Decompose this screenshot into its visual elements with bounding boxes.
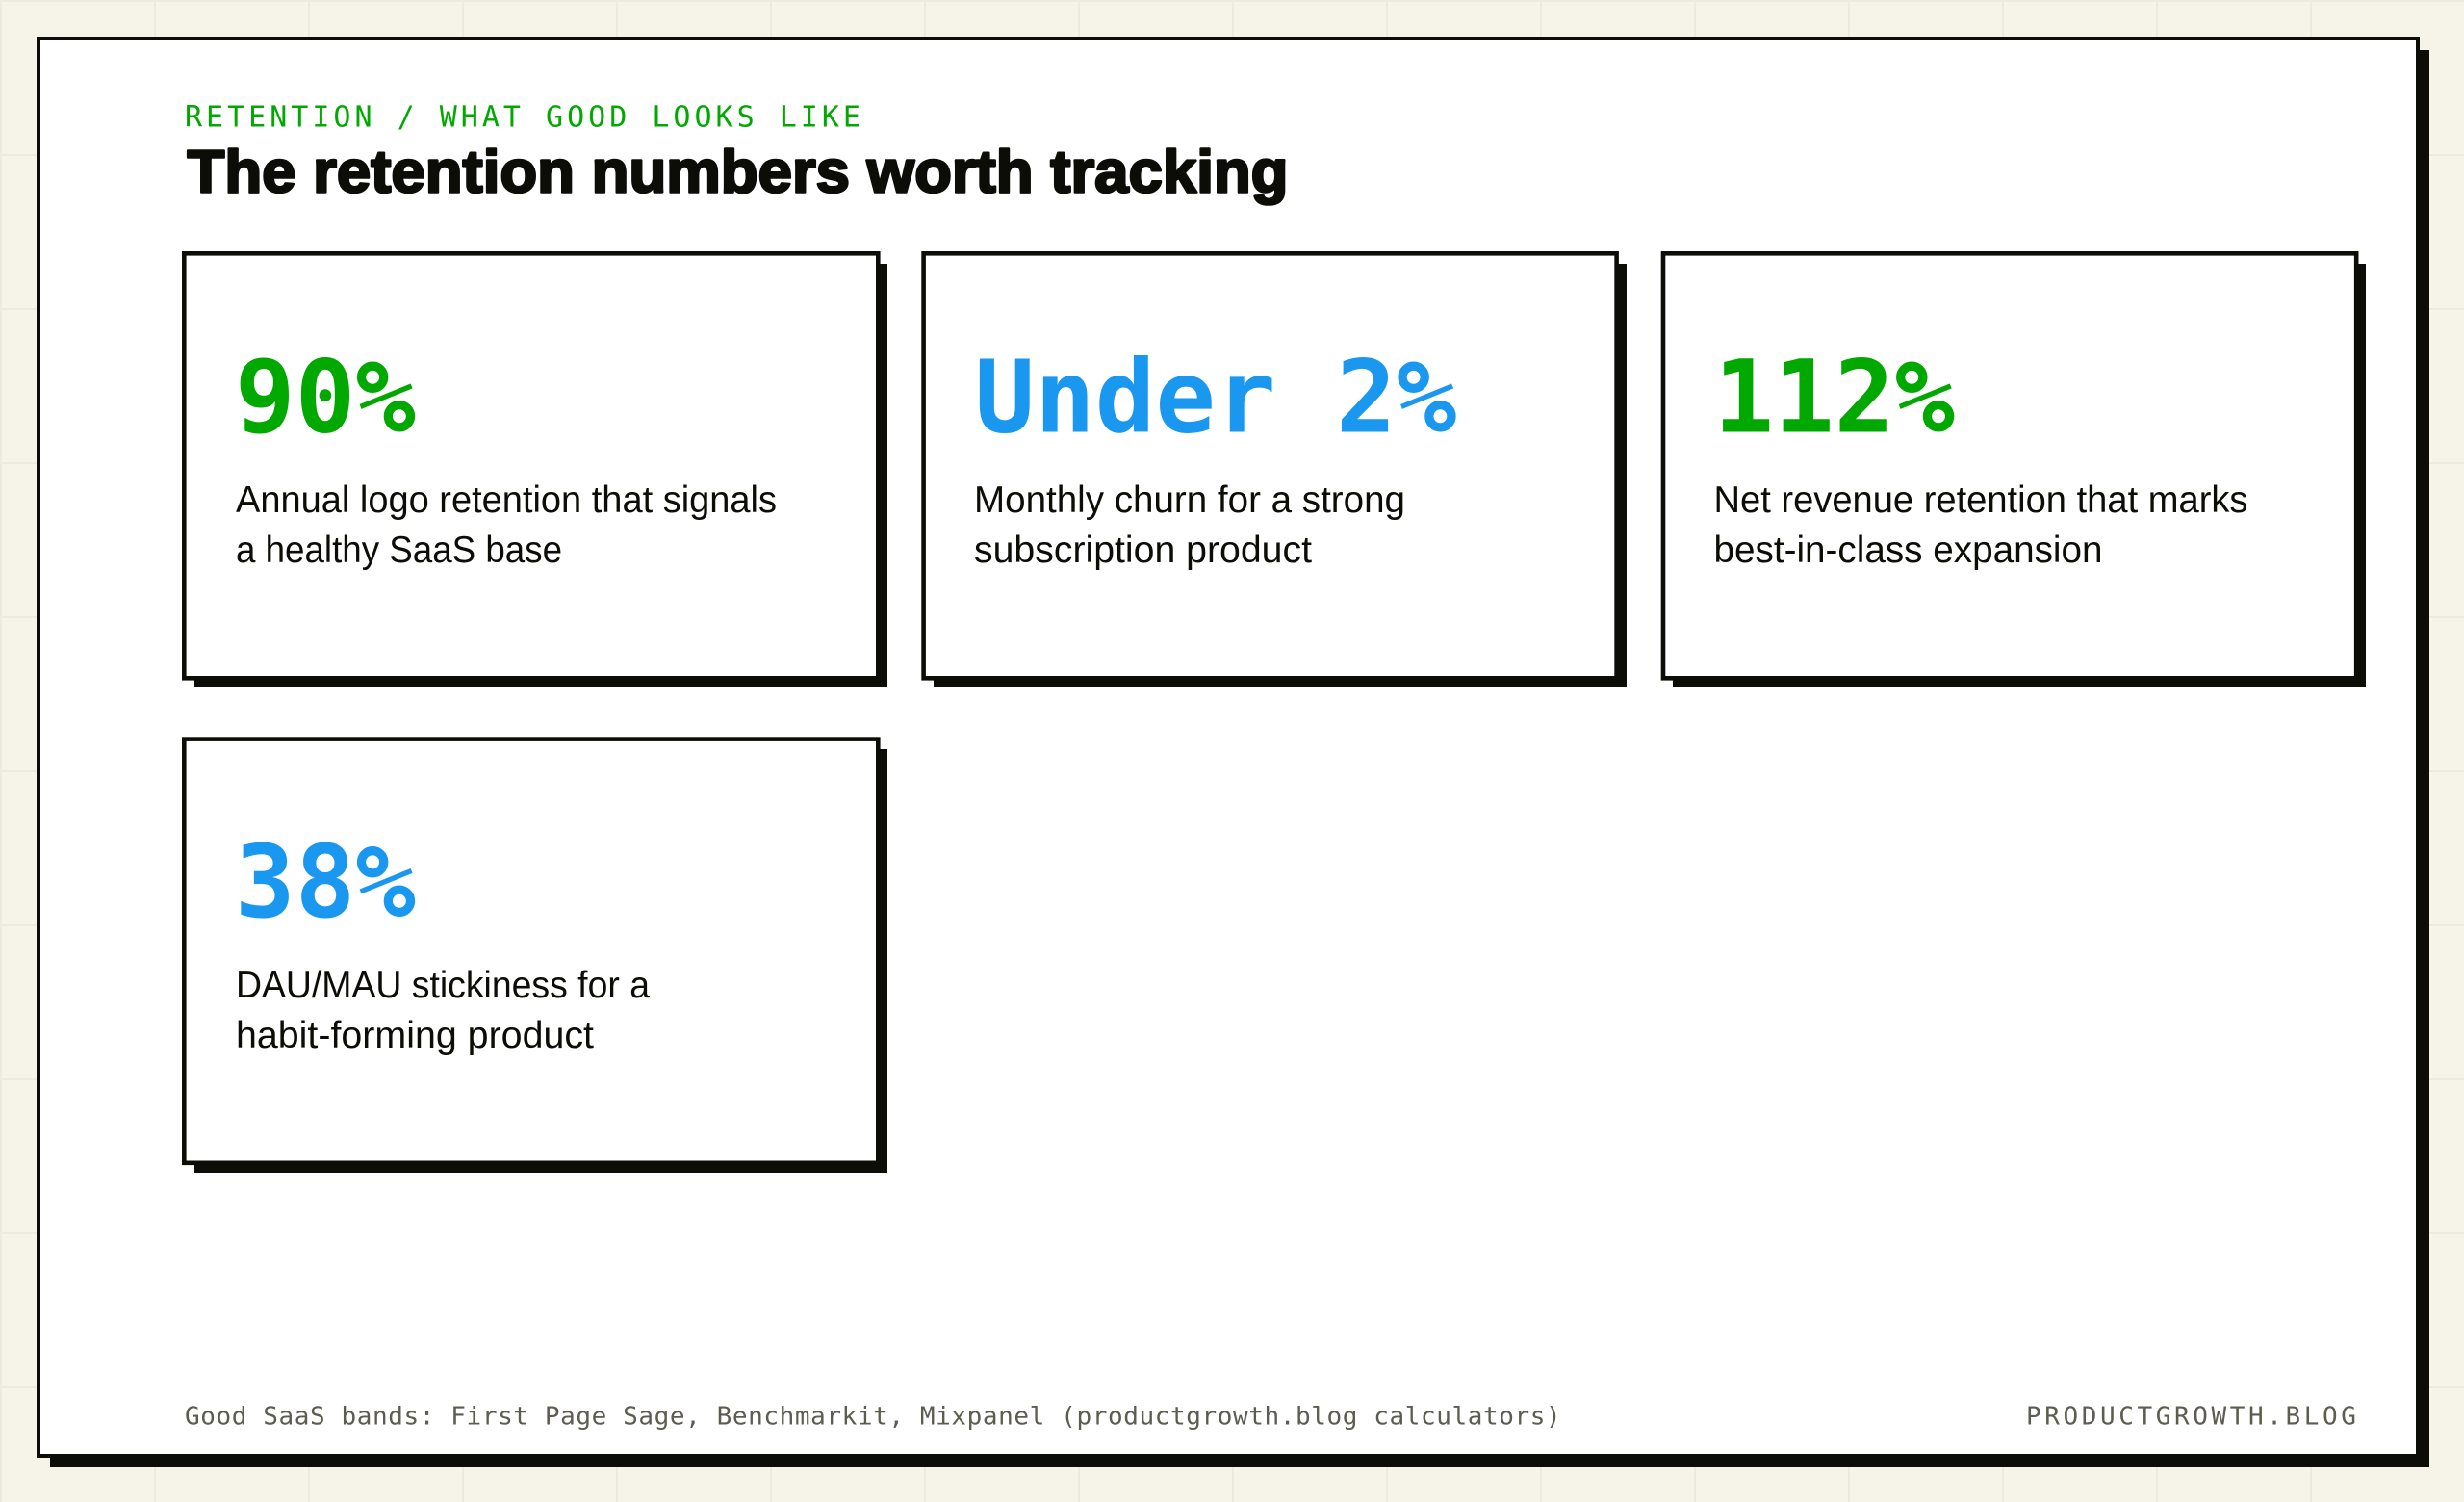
stat: 112%: 112% xyxy=(1713,339,1955,456)
description: Monthly churn for a strong xyxy=(974,479,1405,521)
description: Net revenue retention that marks xyxy=(1713,479,2248,521)
card: net revenue retention xyxy=(1663,253,2366,687)
description: habit-forming product xyxy=(236,1015,594,1056)
description: best-in-class expansion xyxy=(1713,530,2102,571)
card: DAU/MAU stickiness xyxy=(184,739,887,1173)
eyebrow label: RETENTION / WHAT GOOD LOOKS LIKE xyxy=(185,100,864,135)
stat: 90%: 90% xyxy=(235,339,416,456)
footer: site name: PRODUCTGROWTH.BLOG xyxy=(2026,1402,2360,1431)
description: a healthy SaaS base xyxy=(236,530,562,571)
description: subscription product xyxy=(974,530,1312,571)
footer: source note: Good SaaS bands: First Page Sage, Benchmarkit, Mixpanel (productgrowth.blog calculators) xyxy=(185,1402,1561,1431)
title: The retention numbers worth tracking xyxy=(187,139,1288,206)
stat: Under 2%: Under 2% xyxy=(974,339,1456,456)
stat: 38%: 38% xyxy=(235,823,416,941)
card: monthly churn xyxy=(924,253,1627,687)
description: Annual logo retention that signals xyxy=(236,479,777,521)
card: annual logo retention xyxy=(184,253,887,687)
description: DAU/MAU stickiness for a xyxy=(236,965,650,1006)
